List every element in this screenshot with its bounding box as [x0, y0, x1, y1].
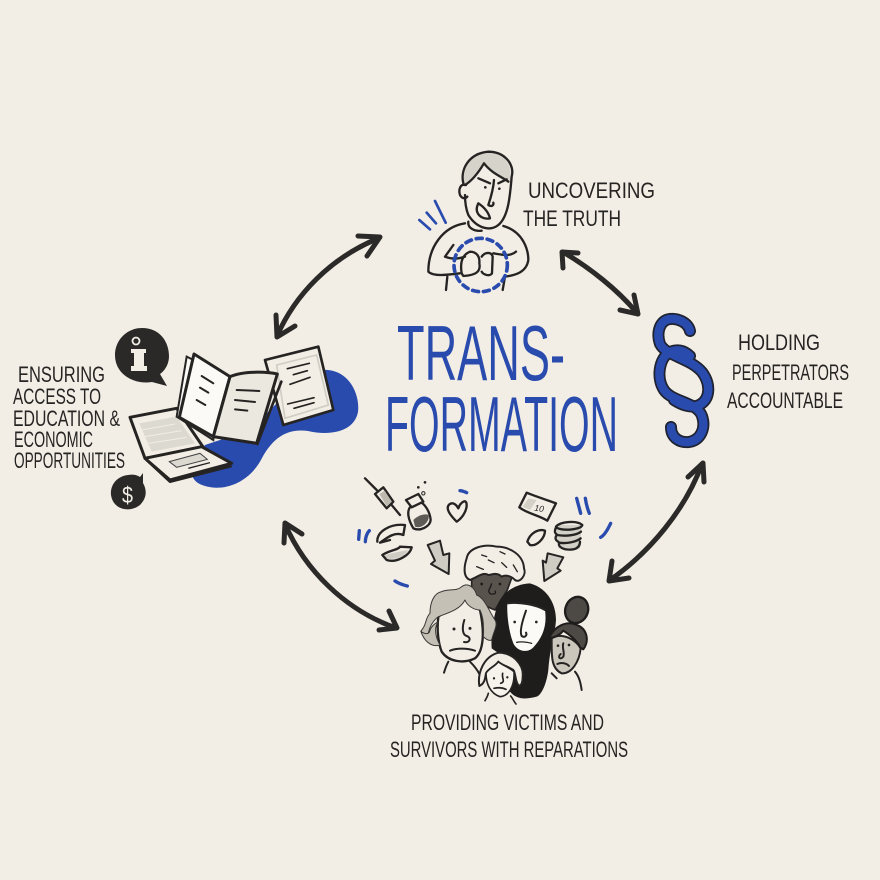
label: ensuring access: ACCESS TO: [13, 384, 101, 409]
label: uncovering the truth: UNCOVERING: [528, 178, 655, 203]
icon: dollar speech bubble: [111, 473, 146, 509]
label: uncovering the truth: [523, 178, 655, 231]
label: ensuring access: ENSURING: [18, 362, 105, 387]
icon: info speech bubble: [115, 328, 169, 386]
loose paper: [265, 347, 333, 425]
icon: dollar speech bubble: $: [122, 482, 133, 508]
label: holding perpetrators accountable: [727, 330, 849, 413]
icon: section sign: [658, 319, 708, 442]
person: woman in black hijab: [491, 583, 556, 698]
banknote: 10: [534, 503, 545, 514]
arrow: truth to accountability: [562, 252, 638, 314]
label: ensuring access: [13, 362, 125, 473]
label: ensuring access: EDUCATION &: [13, 406, 120, 431]
coin: [527, 530, 545, 545]
title: transformation: TRANS-: [397, 309, 565, 397]
person: woman with hair bun: [549, 594, 592, 690]
label: providing victims and survivors with reparations: PROVIDING VICTIMS AND: [411, 710, 604, 735]
blue blob: [192, 370, 358, 488]
icon: man uncovering the truth: [419, 152, 528, 292]
open book: [177, 354, 281, 444]
pill bottle: [406, 481, 431, 529]
icon: reparations items: [359, 478, 611, 586]
person: dark-skinned with curly hair: [465, 546, 525, 610]
person: child: [479, 653, 523, 704]
label: providing victims and survivors with reparations: SURVIVORS WITH REPARATIONS: [390, 737, 628, 762]
title: transformation: [385, 309, 618, 468]
icon: education and laptop illustration: [130, 347, 358, 488]
person: woman with curly gray hair: [421, 585, 496, 674]
coin stack: [555, 522, 582, 550]
blue accent ticks: [359, 491, 611, 586]
syringe: [365, 478, 400, 515]
heart: [448, 501, 467, 522]
arrow: accountability to reparations: [609, 463, 704, 581]
laptop: [130, 408, 232, 482]
label: ensuring access: ECONOMIC: [14, 427, 93, 452]
label: holding perpetrators accountable: HOLDING: [738, 330, 820, 355]
label: uncovering the truth: THE TRUTH: [523, 206, 621, 231]
arrow: education to truth: [276, 236, 380, 337]
label: providing victims and survivors with reparations: [390, 710, 628, 762]
arrow: reparations to education: [284, 523, 397, 630]
bandage: [377, 525, 412, 561]
people group: [421, 546, 592, 704]
title: transformation: FORMATION: [385, 380, 618, 468]
banknote: [519, 493, 556, 521]
label: ensuring access: OPPORTUNITIES: [14, 448, 125, 473]
arrow down right: [543, 553, 563, 581]
arrow down left: [428, 541, 449, 574]
